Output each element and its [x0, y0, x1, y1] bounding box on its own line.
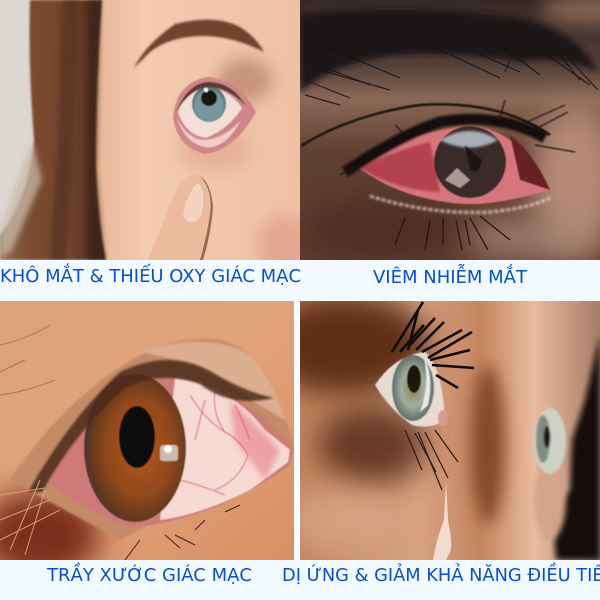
icon: eyebrow hair — [300, 10, 598, 92]
label: dry eye: KHÔ MẮT & THIẾU OXY GIÁC MẠC — [0, 263, 301, 287]
icon: main eye — [375, 352, 448, 427]
icon: tear — [433, 480, 451, 560]
icon: upper lashes — [392, 302, 474, 388]
icon: finger — [148, 175, 210, 260]
icon: dark background — [552, 335, 600, 560]
panel: infection photo — [300, 0, 600, 260]
icon: lower lashes — [405, 430, 458, 490]
panel: dry eye photo — [0, 0, 313, 275]
white gap beside panel 3 — [294, 301, 300, 560]
label: infection: VIÊM NHIỄM MẮT — [373, 264, 527, 288]
panel: allergy photo — [300, 301, 600, 560]
icon: red eye — [45, 374, 294, 527]
icon: upper lashes — [28, 360, 274, 492]
icon: second eye — [534, 408, 566, 474]
icon: upper lid — [10, 339, 294, 540]
panel: corneal scratch photo — [0, 301, 294, 580]
icon: red eye — [301, 100, 575, 212]
icon: lower lashes — [395, 216, 510, 250]
label: corneal scratch: TRẦY XƯỚC GIÁC MẠC — [46, 562, 252, 586]
icon: eyebrow — [134, 20, 264, 68]
icon: skin wrinkles — [0, 325, 55, 395]
icon: lower lashes — [125, 505, 240, 560]
icon: irritated eye — [173, 77, 256, 154]
